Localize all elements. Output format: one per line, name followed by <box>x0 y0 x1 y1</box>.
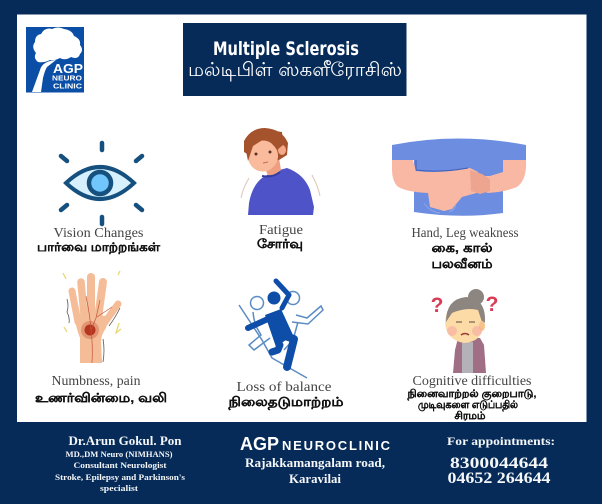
text: loss of balance: Loss of balance <box>236 380 332 395</box>
logo: AGP Neuro Clinic: AGP <box>53 61 83 76</box>
panel: fatigue <box>241 128 320 251</box>
footer: doctor details: Consultant Neurologist <box>74 461 167 470</box>
footer: doctor details: Stroke, Epilepsy and Parkinson's <box>55 473 185 482</box>
icon: painful hand <box>63 271 121 363</box>
footer: clinic name and address: Rajakkamangalam road, <box>245 456 385 470</box>
footer: appointments: 8300044644 <box>450 455 548 472</box>
footer: clinic name and address <box>240 434 391 486</box>
footer: appointments: 04652 264644 <box>448 470 550 487</box>
text: loss of balance: நிலைதடுமாற்றம் <box>227 395 345 410</box>
text: cognitive difficulties: சிரமம் <box>454 410 486 422</box>
text: hand, leg weakness: பலவீனம் <box>432 256 494 271</box>
icon: confused grandmother: ? <box>431 294 443 317</box>
icon: tired boy <box>241 128 320 215</box>
icon: eye <box>61 143 142 224</box>
icon: confused grandmother: ? <box>486 293 498 316</box>
footer: doctor details: MD.,DM Neuro (NIMHANS) <box>66 450 173 459</box>
text: fatigue: Fatigue <box>259 223 303 238</box>
icon: weak hands <box>392 138 526 216</box>
footer: clinic name and address: Karavilai <box>289 472 342 486</box>
title box: Multiple Sclerosis <box>213 38 359 60</box>
panel: hand, leg weakness <box>392 138 526 271</box>
text: hand, leg weakness <box>412 226 518 271</box>
text: hand, leg weakness: Hand, Leg weakness <box>412 226 518 241</box>
text: hand, leg weakness: கை, கால் <box>432 241 493 255</box>
footer: doctor details: Dr.Arun Gokul. Pon <box>68 433 182 448</box>
footer: clinic name and address: NEUROCLINIC <box>282 438 391 453</box>
text: cognitive difficulties <box>406 374 537 422</box>
title box <box>183 23 406 96</box>
text: vision changes <box>37 226 160 254</box>
text: cognitive difficulties: முடிவுகளை எடுப்பதில் <box>418 399 518 412</box>
title box: மல்டிபிள் ஸ்களீரோசிஸ் <box>188 60 402 81</box>
logo: AGP Neuro Clinic: CLINIC <box>53 84 82 90</box>
text: loss of balance <box>227 380 345 410</box>
text: vision changes: Vision Changes <box>54 226 144 241</box>
icon: confused grandmother <box>431 289 498 373</box>
logo: AGP Neuro Clinic: NEURO <box>52 76 83 82</box>
footer: doctor details <box>55 433 185 493</box>
text: cognitive difficulties: நினைவாற்றல் குறைபாடு, <box>406 388 537 402</box>
footer: appointments: For appointments: <box>447 434 555 448</box>
panel: vision changes <box>37 143 160 254</box>
panel: loss of balance <box>227 281 345 410</box>
panel: white content area <box>17 14 586 422</box>
panel: numbness, pain <box>35 271 167 405</box>
footer: doctor details: specialist <box>100 484 138 493</box>
text: fatigue: சோர்வு <box>257 237 303 251</box>
text: numbness, pain: Numbness, pain <box>52 374 140 389</box>
text: cognitive difficulties: Cognitive difficulties <box>412 374 532 389</box>
logo: AGP Neuro Clinic <box>26 27 84 92</box>
text: fatigue <box>257 223 303 251</box>
text: numbness, pain <box>35 374 167 405</box>
icon: falling figure <box>239 281 323 378</box>
footer: appointments <box>447 434 555 487</box>
panel: cognitive difficulties <box>406 289 537 422</box>
footer: clinic name and address: AGP <box>240 434 279 454</box>
text: numbness, pain: உணர்வின்மை, வலி <box>35 391 167 405</box>
text: vision changes: பார்வை மாற்றங்கள் <box>37 240 160 254</box>
